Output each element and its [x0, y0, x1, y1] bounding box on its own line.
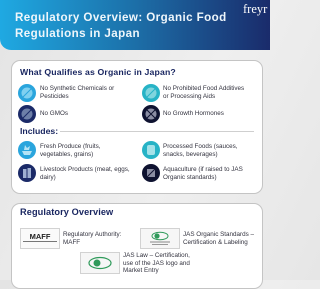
text: fresh produce [40, 143, 101, 158]
title: Regulations in Japan [15, 26, 140, 40]
text: JAS organic standards: JAS Organic Standards – [183, 231, 254, 238]
header banner [0, 0, 270, 50]
heading: what qualifies: What Qualifies as Organic in Japan? [20, 67, 176, 77]
text: livestock products: Livestock Products (meat, eggs, [40, 166, 130, 173]
text: no growth hormones: No Growth Hormones [163, 110, 224, 117]
text: regulatory authority [63, 231, 121, 246]
title [15, 11, 227, 40]
logo: freyr: freyr [243, 2, 267, 16]
logo: MAFF: MAFF [30, 232, 50, 241]
heading: regulatory overview: Regulatory Overview [20, 207, 113, 217]
icon: aquaculture [142, 164, 160, 182]
text: JAS law: use of the JAS logo and [123, 260, 190, 267]
text: regulatory authority: MAFF [63, 239, 80, 246]
text: no GMOs: No GMOs [40, 110, 68, 117]
text: processed foods: Processed Foods (sauces, [163, 143, 238, 150]
text: regulatory authority: Regulatory Authority: [63, 231, 121, 238]
logo: MAFF [20, 228, 60, 249]
text: no synthetic chemicals: No Synthetic Chemicals or [40, 85, 114, 92]
logo: JAS organic standards [140, 228, 180, 249]
text: JAS organic standards [183, 231, 254, 246]
text: processed foods [163, 143, 238, 158]
logo: JAS law [80, 252, 120, 274]
text: aquaculture: Organic standards) [163, 174, 217, 181]
heading: includes: Includes: [20, 126, 58, 136]
icon: no prohibited additives [142, 84, 160, 102]
text: no synthetic chemicals [40, 85, 114, 100]
text: JAS law: Market Entry [123, 267, 159, 274]
text: fresh produce: vegetables, grains) [40, 151, 93, 158]
text: no prohibited additives: or Processing Aids [163, 93, 215, 100]
text: aquaculture: Aquaculture (if raised to JAS [163, 166, 243, 173]
title: Regulatory Overview: Organic Food [15, 11, 227, 24]
text: no prohibited additives: No Prohibited Food Additives [163, 85, 244, 92]
icon: fresh produce [18, 141, 36, 159]
panel: regulatory overview [11, 203, 263, 289]
text: processed foods: snacks, beverages) [163, 151, 218, 158]
text: JAS law [123, 252, 190, 274]
icon: no synthetic chemicals [18, 84, 36, 102]
text: JAS organic standards: Certification & Labeling [183, 239, 248, 246]
panel: what qualifies [11, 60, 263, 194]
icon: no GMOs [18, 105, 36, 123]
text: livestock products [40, 166, 130, 181]
text: no prohibited additives [163, 85, 244, 100]
text: livestock products: dairy) [40, 174, 56, 181]
icon: livestock products [18, 164, 36, 182]
icon: processed foods [142, 141, 160, 159]
text: fresh produce: Fresh Produce (fruits, [40, 143, 101, 150]
text: aquaculture [163, 166, 243, 181]
icon: no growth hormones [142, 105, 160, 123]
text: no synthetic chemicals: Pesticides [40, 93, 69, 100]
text: JAS law: JAS Law – Certification, [123, 252, 190, 259]
